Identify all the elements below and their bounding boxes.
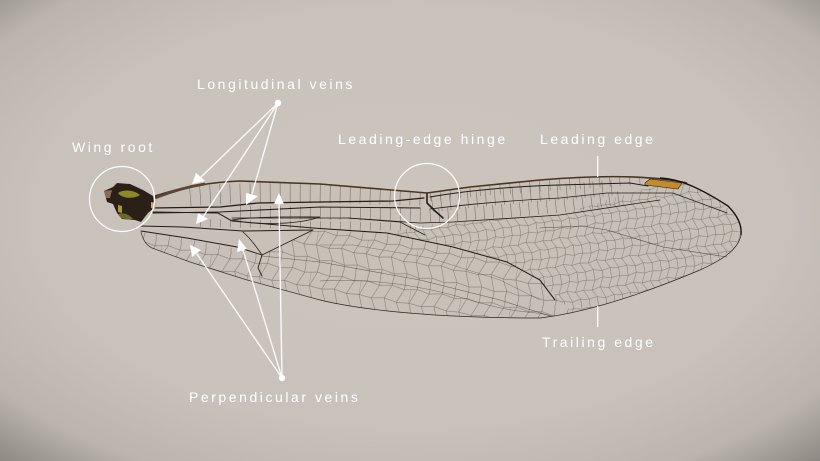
tick bbox=[597, 306, 598, 327]
pointer dot bbox=[275, 100, 281, 106]
wing membrane bbox=[140, 177, 741, 318]
arrow lines bbox=[200, 103, 278, 217]
wing root bbox=[104, 183, 156, 222]
wing outline and thick leading edge bbox=[155, 177, 687, 196]
circle marker bbox=[90, 166, 154, 232]
callout: leading edge bbox=[540, 131, 655, 177]
callout: trailing edge bbox=[542, 306, 656, 350]
arrow heads bbox=[192, 173, 258, 224]
vein mesh bbox=[144, 183, 740, 318]
callout: perpendicular veins bbox=[189, 193, 360, 405]
heading: leading edge: Leading edge bbox=[540, 131, 655, 147]
arrow lines bbox=[197, 204, 282, 378]
callout: wing root bbox=[72, 139, 155, 232]
circle marker bbox=[394, 164, 460, 228]
heading: trailing edge: Trailing edge bbox=[542, 334, 656, 350]
callout: leading-edge hinge bbox=[338, 131, 508, 228]
heading: wing root: Wing root bbox=[72, 139, 155, 155]
pointer dot bbox=[279, 375, 285, 381]
wing specimen bbox=[104, 176, 742, 318]
longitudinal veins bbox=[140, 183, 727, 316]
perpendicular cross veins bbox=[190, 178, 640, 227]
callout: longitudinal veins bbox=[192, 76, 355, 224]
heading: leading-edge hinge: Leading-edge hinge bbox=[338, 131, 508, 147]
arrow heads bbox=[190, 193, 284, 257]
tick bbox=[597, 156, 598, 177]
heading: longitudinal veins: Longitudinal veins bbox=[197, 76, 355, 92]
pterostigma bbox=[645, 179, 682, 189]
heading: perpendicular veins: Perpendicular veins bbox=[189, 389, 360, 405]
